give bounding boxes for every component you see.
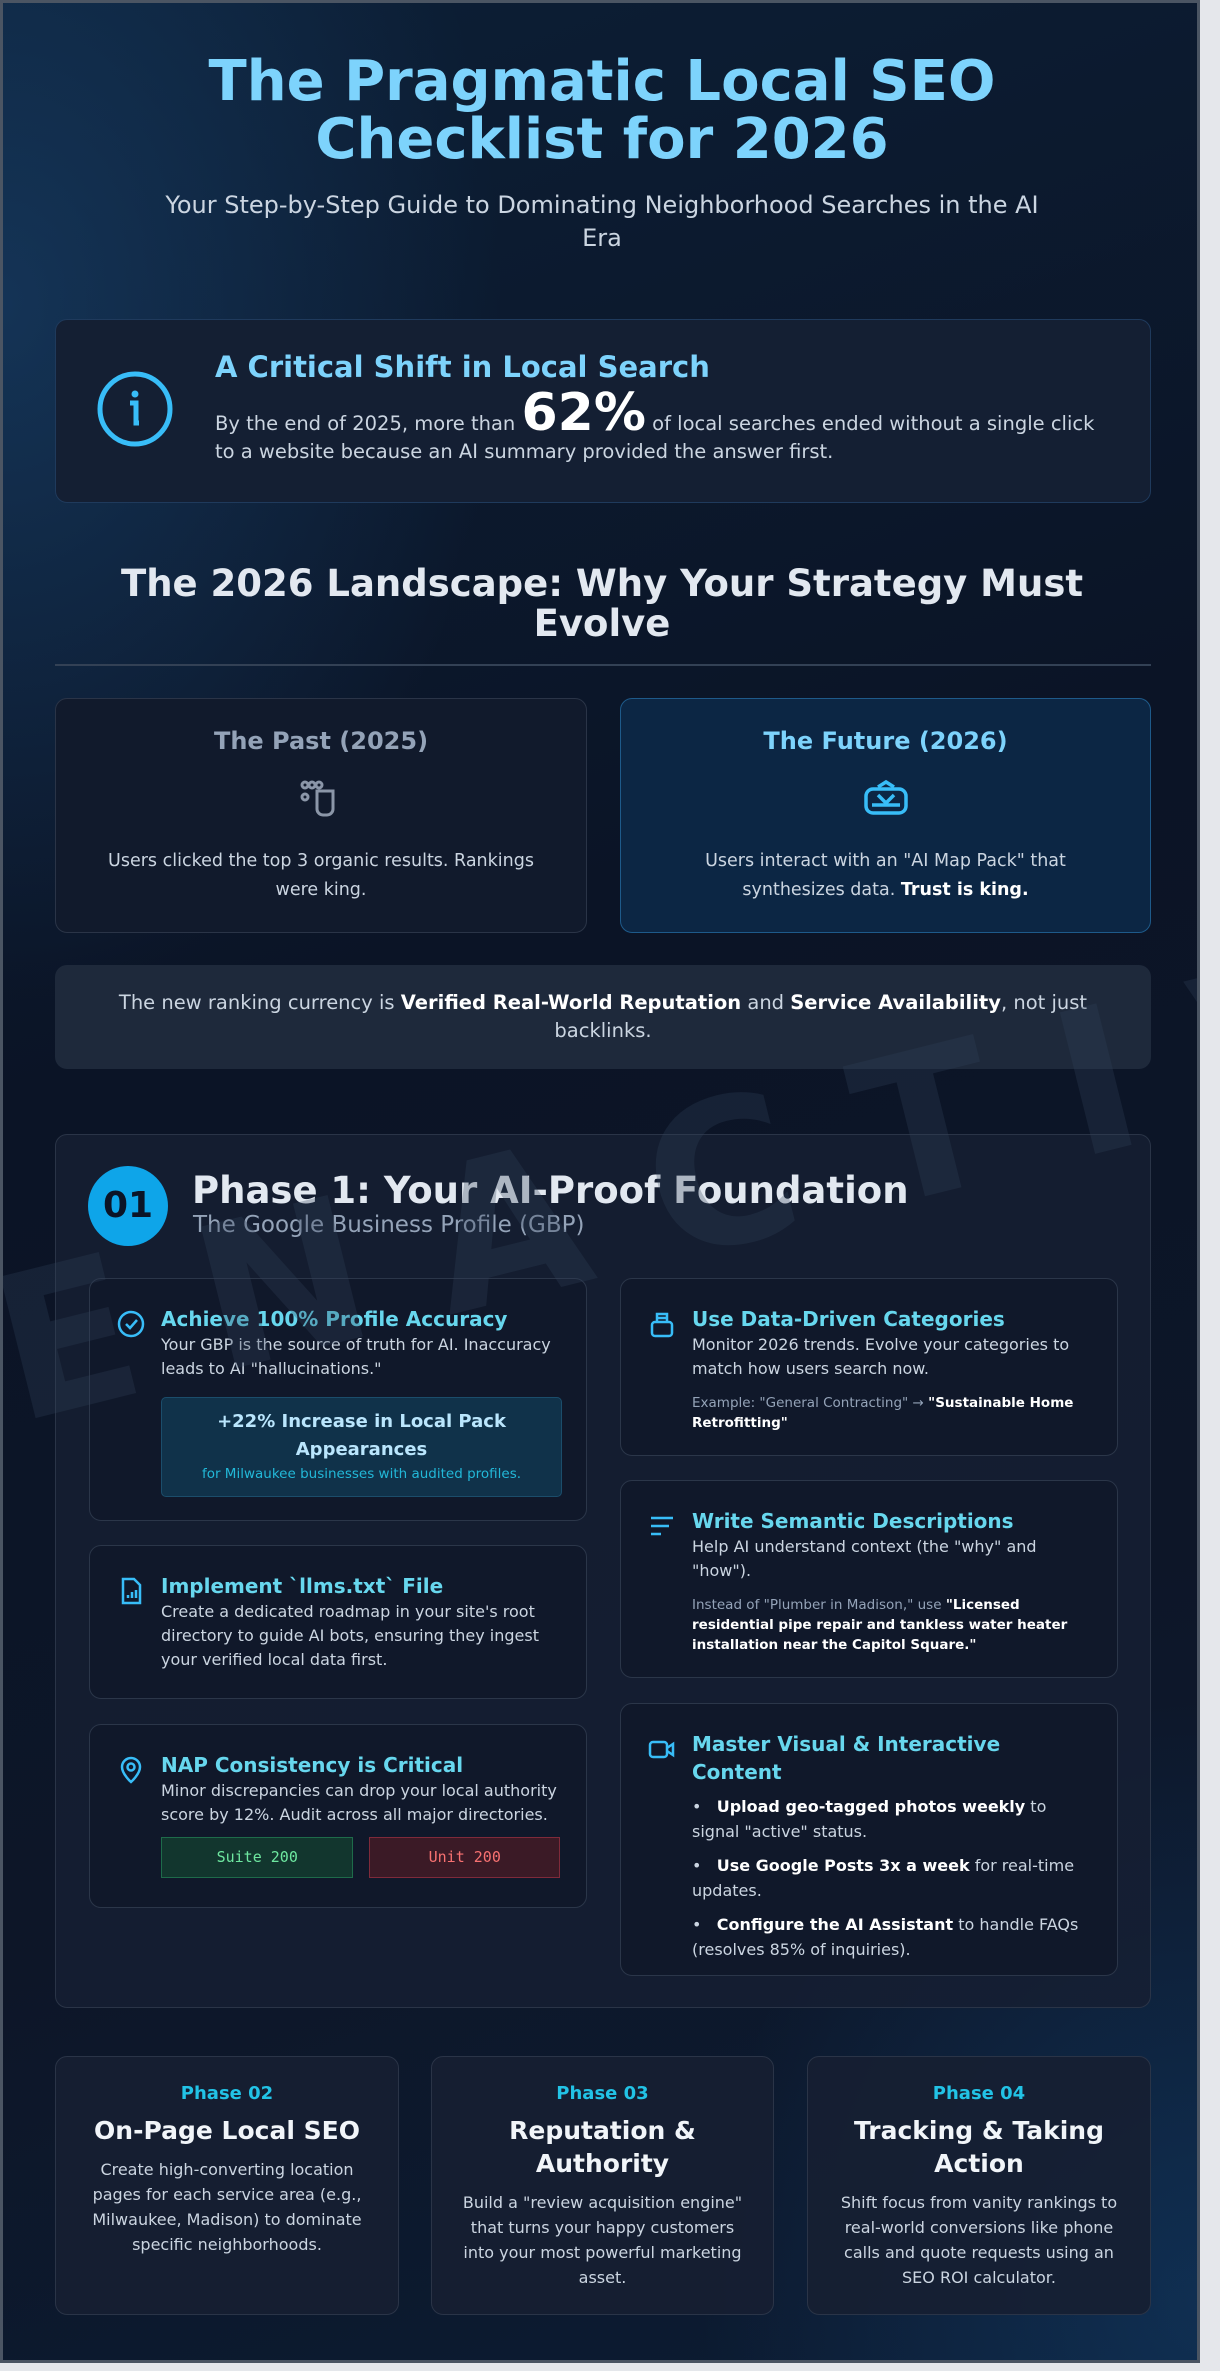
- title: [208, 49, 995, 172]
- heading: A Critical Shift in Local Search: [215, 350, 710, 384]
- title: The Pragmatic Local SEO: [209, 49, 995, 114]
- callout: ranking currency: The new ranking currency is Verified Real-World Reputation and Service Availability, not just backlinks.: [119, 991, 1087, 1042]
- card: semantic: [620, 1480, 1118, 1678]
- title: Checklist for 2026: [315, 107, 889, 172]
- panel: phase 1: [55, 1134, 1151, 2008]
- card: visual content: • Configure the AI Assistant to handle FAQs (resolves 85% of inquiries).: [692, 1915, 1078, 1959]
- panel: phase 04: Phase 04: [933, 2083, 1025, 2104]
- card: semantic: Help AI understand context (the "why" and "how").: [692, 1537, 1037, 1580]
- panel: phase 02: On-Page Local SEO: [94, 2116, 360, 2145]
- panel: phase 02: [55, 2056, 399, 2315]
- card: NAP: NAP Consistency is Critical: [161, 1753, 463, 1777]
- panel: phase 03: [431, 2056, 774, 2315]
- callout: critical shift: [55, 319, 1151, 503]
- panel: phase 04: [807, 2056, 1151, 2315]
- card: categories: Use Data-Driven Categories: [692, 1307, 1005, 1331]
- icon: ai map: [864, 780, 908, 815]
- card: NAP: Minor discrepancies can drop your local authority score by 12%. Audit across all major directories.: [161, 1781, 557, 1824]
- card: llms.txt: Implement `llms.txt` File: [161, 1574, 443, 1598]
- icon: video: [648, 1740, 674, 1758]
- panel: phase 02: Phase 02: [181, 2083, 273, 2104]
- icon: info: [98, 372, 172, 446]
- badges: Unit 200: [429, 1848, 501, 1866]
- card: categories: Example: "General Contracting" → "Sustainable Home Retrofitting": [692, 1395, 1073, 1431]
- badges: Suite 200: [217, 1848, 298, 1866]
- card: visual content: [620, 1703, 1118, 1976]
- panel: future: The Future (2026): [763, 727, 1008, 755]
- panel: past: The Past (2025): [214, 727, 428, 755]
- card: visual content: • Use Google Posts 3x a week for real-time updates.: [692, 1856, 1074, 1900]
- stat box: [161, 1397, 562, 1497]
- stat box: +22% Increase in Local Pack: [217, 1411, 506, 1432]
- card: visual content: Master Visual & Interactive Content: [692, 1732, 1000, 1784]
- panel: phase 03: Build a "review acquisition engine" that turns your happy customers into your most powerful marketing asset.: [463, 2193, 742, 2287]
- icon: check: [118, 1310, 144, 1338]
- card: categories: [620, 1278, 1118, 1456]
- phase title: Phase 1: Your AI-Proof Foundation: [192, 1169, 909, 1212]
- card: llms.txt: [89, 1545, 587, 1699]
- icon: file: [122, 1578, 142, 1604]
- icon: 01 badge: 01: [103, 1185, 153, 1226]
- icon: pin: [120, 1756, 142, 1784]
- panel: phase 04: Shift focus from vanity rankings to real-world conversions like phone calls and quote requests using an SEO ROI calculator.: [841, 2193, 1117, 2287]
- panel: future: [620, 698, 1151, 933]
- heading: landscape: The 2026 Landscape: Why Your Strategy Must Evolve: [121, 562, 1083, 645]
- stat box: for Milwaukee businesses with audited profiles.: [202, 1466, 521, 1482]
- icon: category: [650, 1312, 674, 1338]
- card: NAP: [89, 1724, 587, 1908]
- card: profile accuracy: [89, 1278, 587, 1521]
- panel: phase 03: Phase 03: [556, 2083, 649, 2104]
- panel: phase 04: Tracking & Taking Action: [854, 2116, 1104, 2178]
- icon: 01 badge: [88, 1166, 168, 1246]
- icon: lines: [651, 1516, 673, 1536]
- callout: ranking currency: [55, 965, 1151, 1069]
- subtitle: Your Step-by-Step Guide to Dominating Neighborhood Searches in the AI Era: [165, 191, 1039, 252]
- card: llms.txt: Create a dedicated roadmap in your site's root directory to guide AI bots, ensuring they ingest your verified local data first.: [161, 1602, 539, 1669]
- phase subtitle: The Google Business Profile (GBP): [193, 1212, 584, 1238]
- card: visual content: • Upload geo-tagged photos weekly to signal "active" status.: [692, 1797, 1046, 1841]
- card: profile accuracy: Your GBP is the source of truth for AI. Inaccuracy leads to AI "hallucinations.": [161, 1335, 551, 1378]
- card: profile accuracy: Achieve 100% Profile Accuracy: [161, 1307, 507, 1331]
- stat box: Appearances: [296, 1439, 427, 1460]
- badges: [161, 1837, 560, 1878]
- panel: future: Users interact with an "AI Map Pack" that synthesizes data. Trust is king.: [705, 851, 1066, 900]
- panel: phase 03: Reputation & Authority: [509, 2116, 696, 2178]
- icon: click: [300, 780, 334, 816]
- card: semantic: Instead of "Plumber in Madison," use "Licensed residential pipe repair and tankless water heater installation near the Capitol Square.": [692, 1597, 1067, 1653]
- card: semantic: Write Semantic Descriptions: [692, 1509, 1014, 1533]
- panel: past: [55, 698, 587, 933]
- card: categories: Monitor 2026 trends. Evolve your categories to match how users search now.: [692, 1335, 1069, 1378]
- panel: phase 02: Create high-converting location pages for each service area (e.g., Milwaukee, Madison) to dominate specific neighborhoods.: [92, 2160, 362, 2254]
- panel: past: Users clicked the top 3 organic results. Rankings were king.: [108, 851, 534, 900]
- text block: By the end of 2025, more than 62% of local searches ended without a single click to a website because an AI summary provided the answer first.: [215, 383, 1094, 463]
